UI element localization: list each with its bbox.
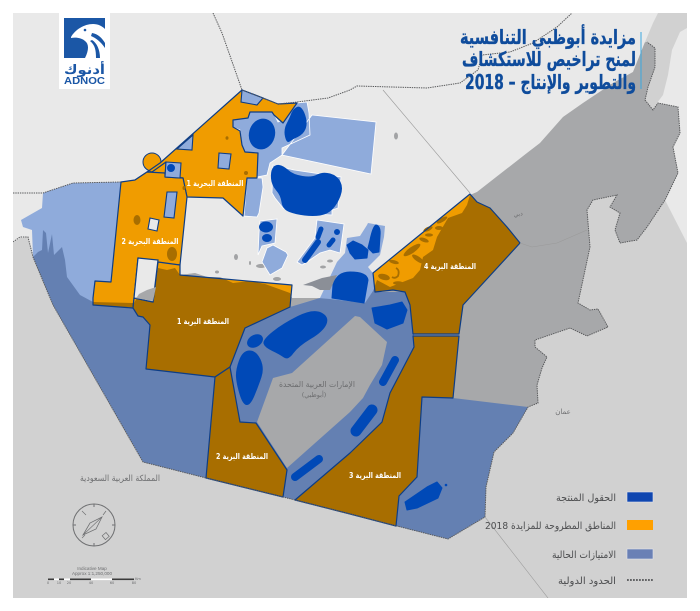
legend: الامتيازات الحالية [552,550,616,561]
scale bar [47,566,141,585]
block labels: المنطقة البرية 3 [349,471,401,480]
small concession patches within offshore blocks [164,90,263,218]
small brown islets in offshore block 1 [226,136,248,175]
title: مزايدة أبوظبي التنافسية [460,23,636,50]
block labels [122,179,476,480]
producing fields [168,107,447,510]
legend: الحدود الدولية [558,576,616,587]
offshore block 1 [135,90,297,216]
country labels: دبي [513,210,524,219]
block labels: المنطقة البرية 4 [424,262,476,271]
scale bar: Indicative Map [77,566,107,571]
block labels: المنطقة البحرية 2 [122,237,179,246]
country labels: عمان [555,408,571,416]
scale bar: Km [135,577,141,581]
concession: north-west offshore [21,182,215,478]
onshore block 1 [133,262,292,377]
scale bar: 80 [132,581,137,585]
scale bar: 40 [89,581,94,585]
concession: south-east onshore zone [396,397,528,539]
scale bar: 20 [67,581,72,585]
block labels: المنطقة البحرية 1 [186,179,244,188]
block labels: المنطقة البرية 1 [177,317,229,326]
concessions: offshore light blue blocks [233,102,376,275]
scale bar: 60 [110,581,115,585]
title: والتطوير والإنتاج – 2018 [465,70,636,94]
islands [215,132,398,281]
legend: الحقول المنتجة [556,493,616,504]
scale bar: 10 [57,581,62,585]
Abu Dhabi interior land [257,316,387,468]
logo: ADNOC: أدنوك [64,61,105,78]
white hole in offshore block 2 [148,218,159,231]
concession: central onshore zone [230,223,415,500]
country labels: المملكة العربية السعودية [80,474,160,484]
scale bar: 0 [47,581,50,585]
block labels: المنطقة البرية 2 [216,452,268,461]
region: UAE land [182,42,680,539]
legend: المناطق المطروحة للمزايدة 2018 [485,521,616,532]
onshore block 2 [206,367,287,497]
compass [73,504,115,546]
logo: ADNOC [59,13,110,89]
title [460,23,636,94]
small island near Abu Dhabi [303,275,337,290]
onshore block 3 [295,336,459,526]
onshore block 4 [373,194,520,334]
legend [485,492,653,587]
country labels: (أبوظبي) [302,390,326,399]
logo: ADNOC: ADNOC [64,75,105,87]
hole in offshore block 2 [134,258,158,302]
scale bar: Approx 1:1,250,000 [72,571,112,576]
offshore block 2 [93,172,187,308]
country labels: الإمارات العربية المتحدة [279,380,355,390]
title accent line [640,32,642,89]
country labels [80,210,571,484]
